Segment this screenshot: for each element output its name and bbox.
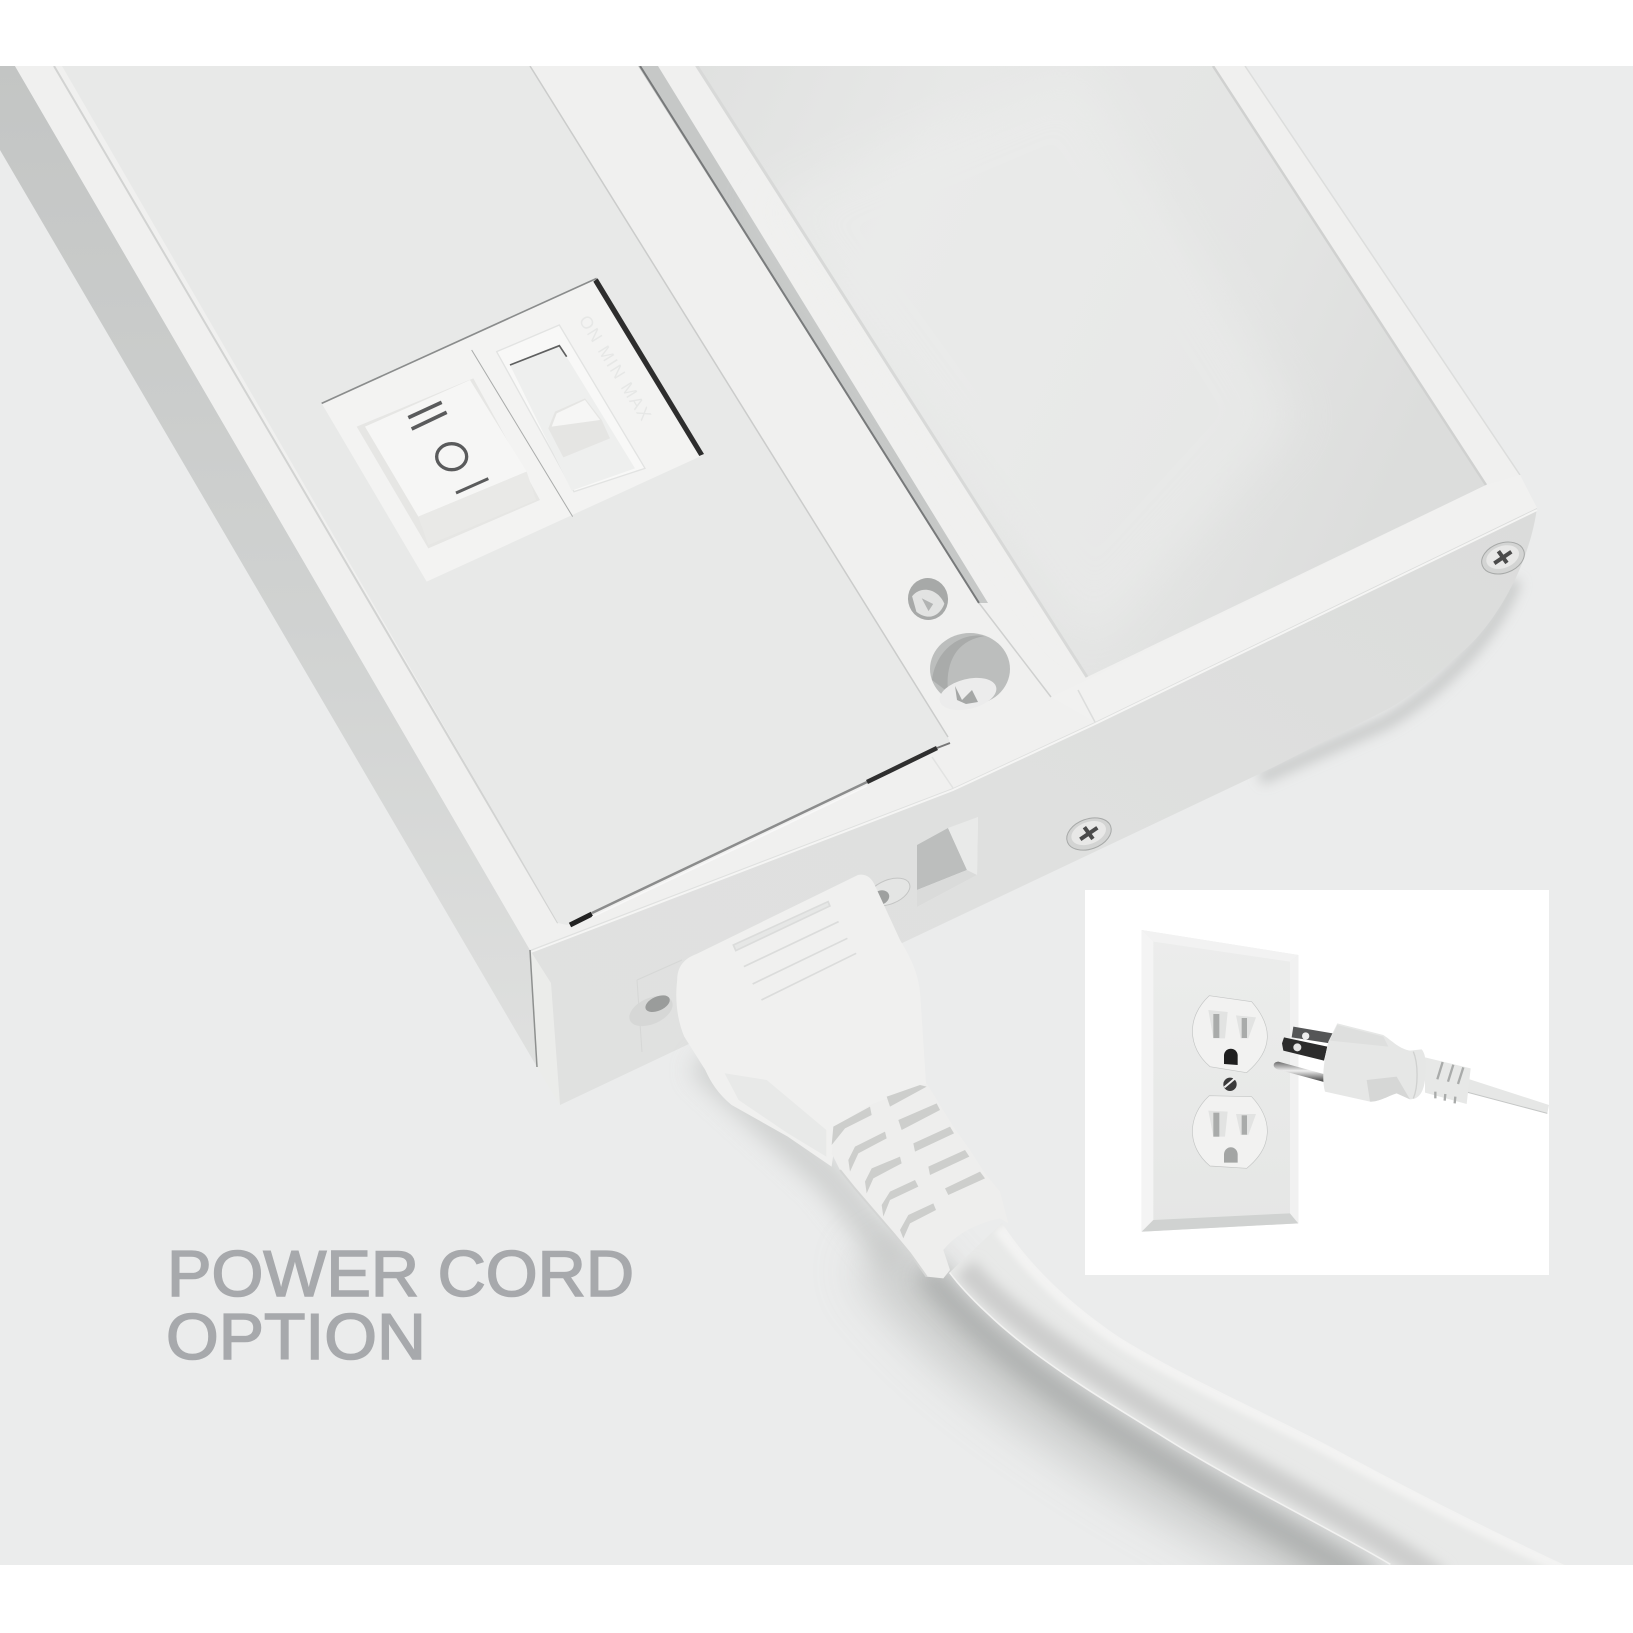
inset cord	[1465, 1078, 1549, 1113]
plug lower shading	[725, 1073, 826, 1157]
rear blade	[1292, 1027, 1333, 1043]
fixture: gap wall between cover and lens frame	[638, 66, 988, 603]
lens bright glow	[760, 66, 1300, 650]
strain relief slots	[832, 1085, 985, 1238]
fixture: left side face	[0, 66, 537, 1067]
slide thumb	[548, 398, 610, 457]
cord shadow wide	[880, 1250, 1370, 1590]
slide switch frame	[497, 325, 645, 492]
rocker symbols	[408, 402, 488, 493]
strain relief	[832, 1083, 1008, 1278]
strain relief left edge	[840, 1170, 927, 1277]
slide switch slot	[510, 345, 635, 491]
plug collar with ribs	[1425, 1057, 1471, 1104]
port: square opening	[917, 817, 978, 890]
plug body and grooves	[676, 875, 926, 1167]
power cord	[949, 1260, 1446, 1565]
slot: left of plug	[630, 995, 672, 1026]
fixture: flange groove	[54, 66, 558, 923]
fixture: diffuser lens	[695, 66, 1486, 677]
wall plate bevels	[1142, 930, 1298, 1232]
ground pin	[1274, 1062, 1326, 1082]
plug body highlight and shade	[1330, 1025, 1417, 1102]
rocker top face	[365, 380, 527, 517]
inset: outlet and plug panel	[1085, 890, 1549, 1275]
lens inner edge shadows	[697, 66, 1486, 677]
heading: power cord option	[166, 1237, 634, 1373]
faint label outline on front face	[637, 960, 682, 1052]
strain relief body	[832, 1083, 1008, 1278]
cord body	[949, 1266, 1374, 1554]
fixture: switch cover plate	[496, 816, 558, 923]
front face left bevel	[530, 950, 560, 1105]
end cap rim	[1486, 485, 1487, 486]
shadow under fixture end cap	[1260, 580, 1515, 778]
slot top shadow	[510, 346, 567, 365]
fixture: top surface	[15, 66, 416, 754]
cutout top edge	[322, 278, 597, 403]
screw: front face	[1066, 817, 1112, 851]
rocker lower face	[418, 472, 536, 545]
front face top highlight	[531, 510, 1537, 952]
lens frame left edge	[979, 603, 1051, 697]
screw: right end cap	[1481, 542, 1525, 574]
switch cutout	[322, 278, 703, 582]
rocker switch recess	[357, 378, 540, 548]
cover plate seam	[530, 66, 948, 737]
mounting hole: small oval	[908, 578, 948, 620]
plug body	[1323, 1023, 1426, 1102]
plug shadow on surface	[700, 1060, 900, 1265]
inset white background	[1085, 890, 1549, 1275]
inset plug	[1274, 1023, 1549, 1113]
embossed switch label: ON MIN MAX	[575, 312, 656, 425]
cord shading	[949, 1228, 1565, 1580]
frame outer edge	[1245, 66, 1520, 475]
switch assembly	[322, 278, 704, 582]
cover lower slit	[570, 743, 950, 925]
cord shadow tight	[925, 1270, 1375, 1585]
heading line 1: POWER CORD	[167, 1237, 634, 1310]
heading line 2: OPTION	[166, 1300, 426, 1373]
wall plate	[1142, 930, 1298, 1232]
strip joint line	[932, 757, 953, 788]
divider between switches	[472, 350, 573, 517]
gap dark line	[640, 66, 979, 603]
side to front corner line	[530, 950, 537, 1067]
plug grip grooves	[733, 902, 856, 1000]
lower receptacle	[1192, 1096, 1267, 1168]
mounting hole: large with screw	[930, 633, 1010, 704]
front blade	[1282, 1037, 1327, 1061]
cutout right dark edge	[593, 278, 704, 456]
upper receptacle	[1192, 996, 1267, 1073]
inset wall plate and receptacles	[1142, 930, 1298, 1232]
center screw	[1223, 1078, 1237, 1091]
rim joint line	[1078, 690, 1095, 722]
plug body	[676, 875, 926, 1167]
slot: right of plug	[875, 878, 910, 906]
fixture: front end face	[530, 508, 1537, 1105]
